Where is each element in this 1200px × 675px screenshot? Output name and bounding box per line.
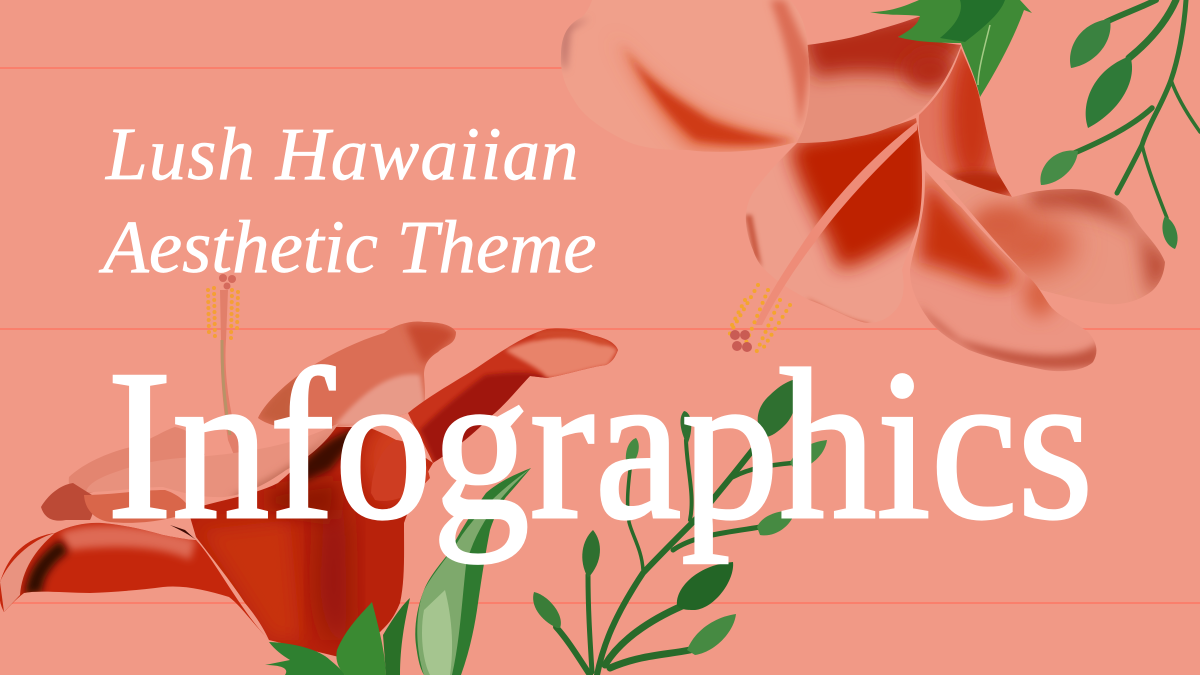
anthers (729, 285, 790, 355)
stigma (730, 330, 752, 352)
flower: upper hibiscus (555, 0, 1172, 375)
petal: centre upper (797, 16, 961, 143)
petal: bottom right (910, 170, 1096, 371)
vine: lower centre (533, 379, 827, 675)
pistil (208, 274, 250, 470)
subtitle line 1: Lush Hawaiian (106, 113, 580, 196)
back left petal (69, 427, 205, 500)
decorative horizontal lines (0, 67, 1200, 604)
inner swirl (371, 440, 430, 501)
back petal (258, 322, 456, 427)
pale petal (86, 424, 338, 497)
petal: lower right lobe (958, 180, 1165, 300)
sepal middle (336, 602, 386, 675)
calyx tube / body (190, 427, 433, 656)
right petal (408, 328, 618, 463)
long leaf (410, 465, 535, 675)
vine: upper right (1040, 0, 1200, 249)
pistil stem (755, 122, 917, 325)
calyx (870, 0, 1032, 97)
petal: upper right (918, 48, 1012, 197)
petal shadow (170, 525, 196, 540)
petal: top left (555, 0, 815, 160)
sepal right (383, 598, 410, 675)
flower: lower hibiscus (0, 274, 625, 675)
lower left petal (0, 520, 275, 645)
petal: centre lower (746, 118, 922, 323)
under pale petal (84, 490, 190, 523)
sepal left (265, 642, 345, 675)
subtitle line 2: Aesthetic Theme (103, 206, 597, 289)
curled petal tip (41, 483, 93, 521)
leaves and buds (533, 379, 827, 655)
title: Infographics (107, 325, 1093, 564)
